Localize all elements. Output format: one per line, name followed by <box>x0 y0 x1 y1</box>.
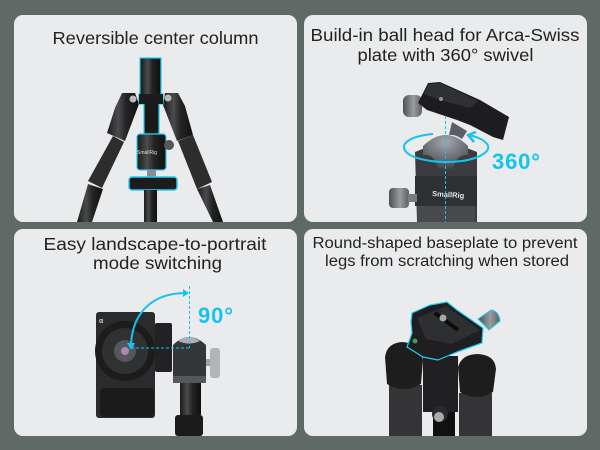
dashed guides <box>131 286 190 348</box>
heading: Reversible center column <box>52 28 258 48</box>
panel: built-in ball head <box>304 15 587 222</box>
heading: Round-shaped baseplate to prevent <box>312 235 578 252</box>
panel: round-shaped baseplate <box>304 229 587 436</box>
heading <box>312 235 578 270</box>
folded legs <box>385 342 496 436</box>
ball head: SmallRig <box>432 189 465 200</box>
heading: Easy landscape-to-portrait <box>44 234 267 254</box>
heading <box>310 25 580 65</box>
ball head plate <box>403 82 509 140</box>
heading: plate with 360° swivel <box>358 45 534 65</box>
rotation arrow <box>404 132 488 162</box>
90 degree arrow <box>127 289 189 350</box>
heading: legs from scratching when stored <box>325 253 569 270</box>
camera: α <box>99 318 104 325</box>
center column with highlight: SmallRig <box>137 150 157 156</box>
heading: mode switching <box>93 253 222 273</box>
baseplate highlight <box>407 302 500 360</box>
360 degree label: 360° <box>492 149 540 174</box>
ball head and column <box>155 323 220 436</box>
panel: reversible center column <box>14 15 297 222</box>
tripod legs <box>77 93 223 222</box>
ball head <box>389 122 477 222</box>
camera <box>95 312 155 418</box>
panel: landscape to portrait <box>14 229 297 436</box>
heading <box>44 234 267 273</box>
center column with highlight <box>129 58 177 222</box>
heading: Build-in ball head for Arca-Swiss <box>310 25 580 45</box>
axis dashed line <box>444 116 446 222</box>
90 degree label: 90° <box>198 303 233 328</box>
